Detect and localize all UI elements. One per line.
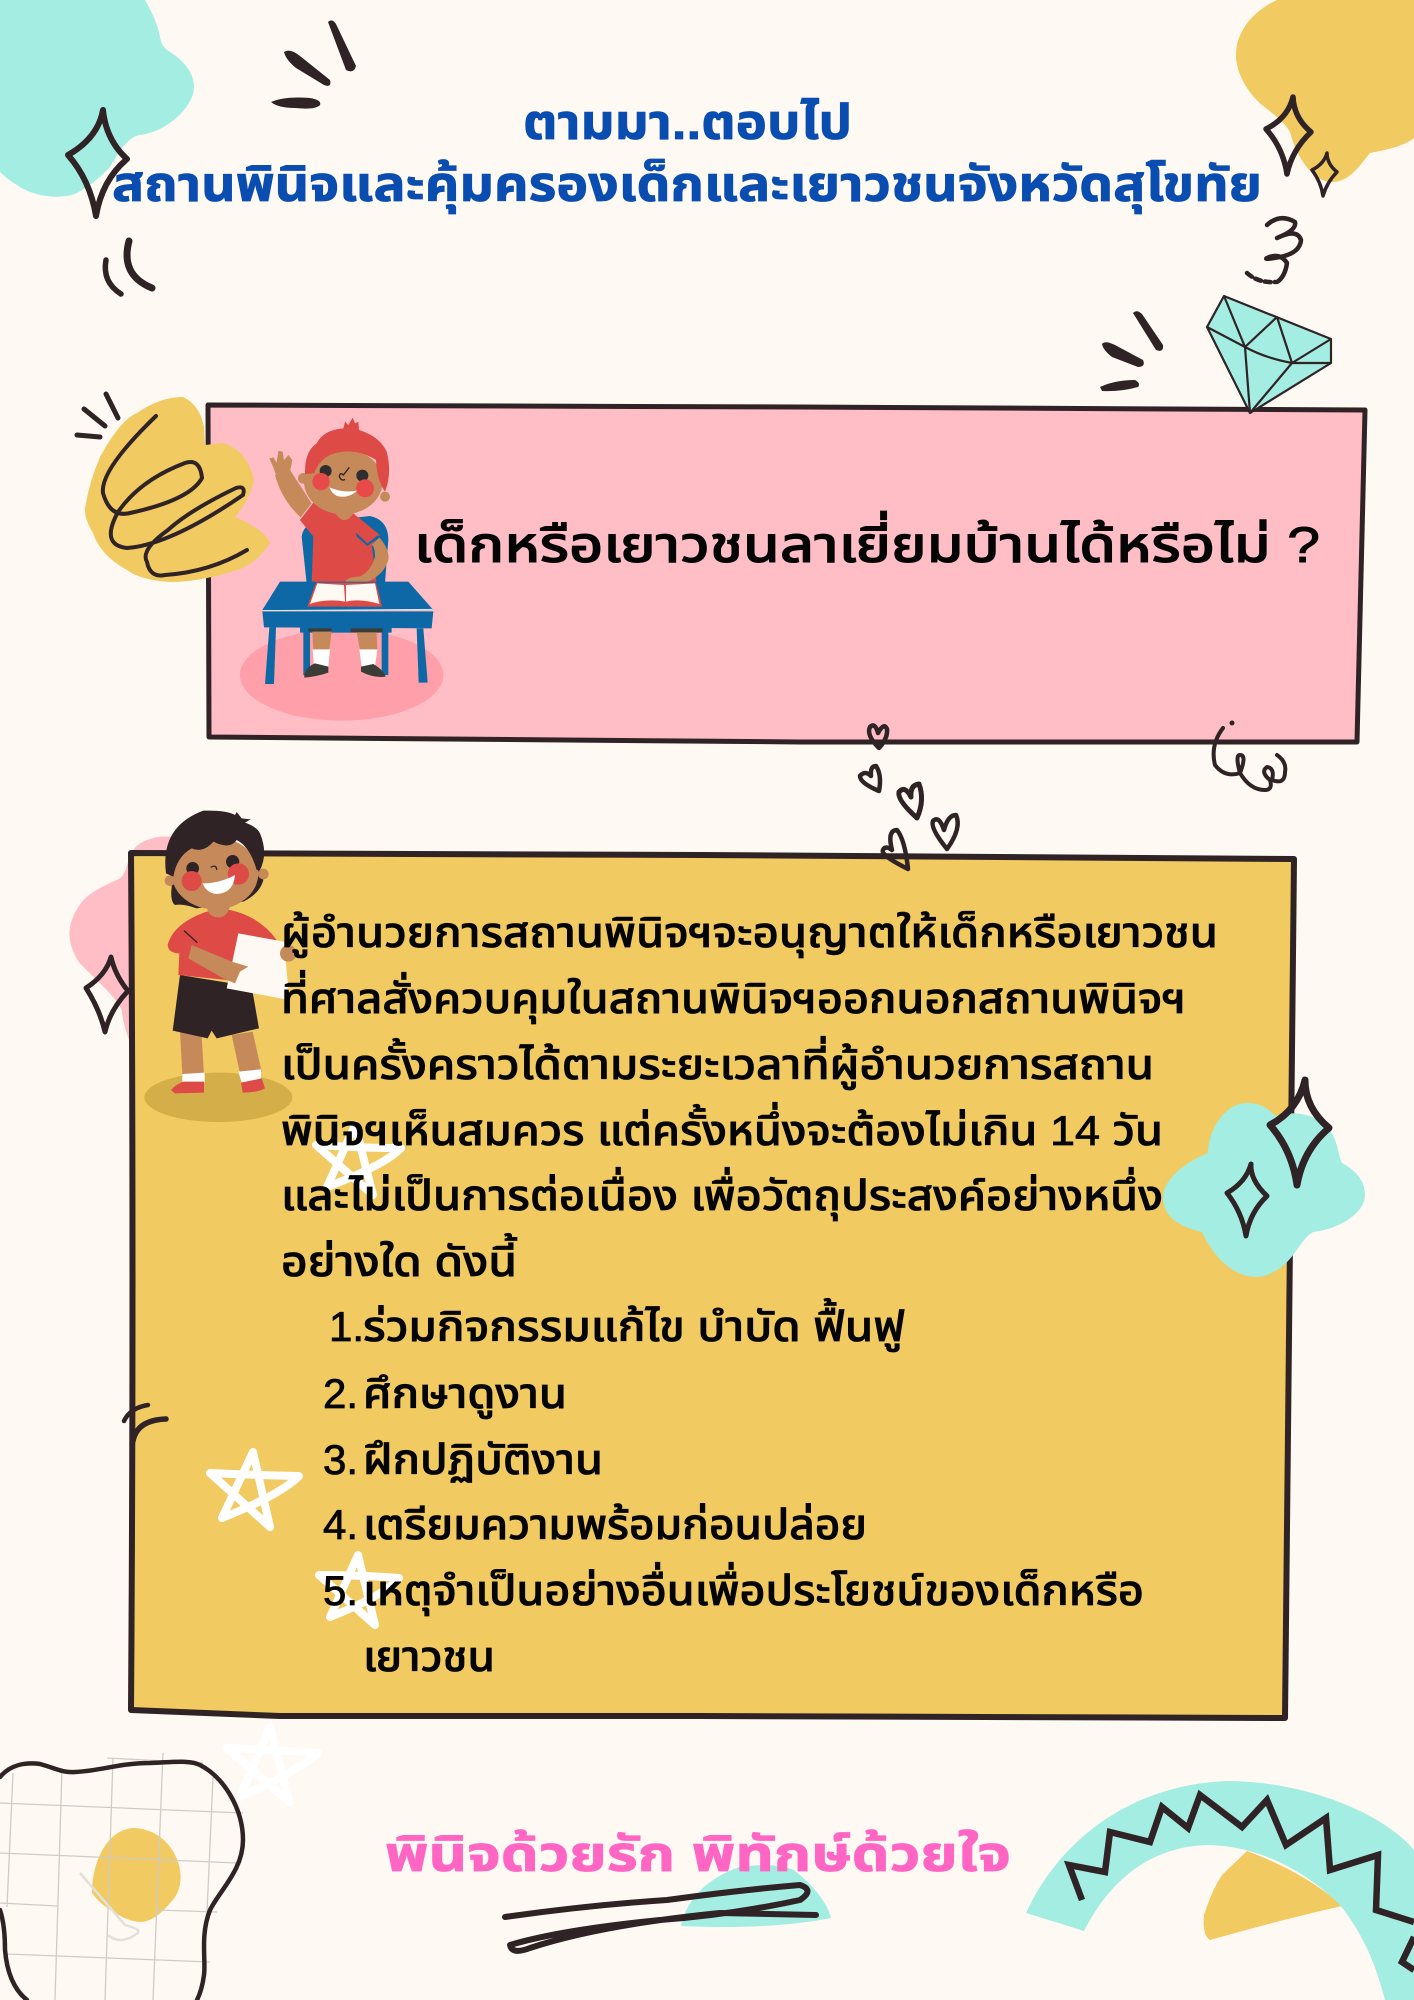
blob with scribble [77,394,270,582]
item 2: 2. [323,1370,358,1417]
title line 1: ตามมา..ตอบไป [523,96,852,150]
title line 2: สถานพินิจและคุ้มครองเด็กและเยาวชนจังหวัดสุโขทัย [112,158,1262,214]
line 2: ที่ศาลสั่งควบคุมในสถานพินิจฯออกนอกสถานพินิจฯ [281,970,1186,1024]
blob: teal top-left [0,0,194,197]
item 5: เหตุจำเป็นอย่างอื่นเพื่อประโยชน์ของเด็กหรือ [363,1562,1144,1616]
blob: yellow top-right [1236,0,1414,182]
list [323,1298,1144,1680]
panel: question (pink) [208,405,1365,742]
star: white faint bottom [227,1727,318,1803]
item 1: 1. [329,1303,364,1350]
arch: teal bottom right [1026,1781,1414,2000]
line 3: เป็นครั้งคราวได้ตามระยะเวลาที่ผู้อำนวยการสถาน [281,1036,1154,1090]
item 3: ฝึกปฏิบัติงาน [363,1436,603,1483]
sparkles: title right [1266,97,1337,196]
item 1: ร่วมกิจกรรมแก้ไข บำบัด ฟื้นฟู [363,1298,905,1352]
item 4: 4. [323,1501,358,1548]
blob: pink behind panel [69,837,193,1047]
question heading: เด็กหรือเยาวชนลาเยี่ยมบ้านได้หรือไม่ ? [414,511,1320,573]
line 1: ผู้อำนวยการสถานพินิจฯจะอนุญาตให้เด็กหรือเยาวชน [281,909,1218,958]
stars on panel [210,1125,401,1625]
mark: panel left edge [124,1405,166,1441]
squiggle: loops [1214,720,1285,790]
burst marks: diamond [1100,311,1163,391]
item 5: 5. [323,1567,358,1614]
item 2: ศึกษาดูงาน [363,1370,567,1419]
teal half blob with scribble [505,1865,831,1951]
title [112,96,1262,214]
line 6: อย่างใด ดังนี้ [281,1233,517,1285]
line 4: พินิจฯเห็นสมควร แต่ครั้งหนึ่งจะต้องไม่เกิน 14 วัน [281,1102,1163,1154]
diamond icon [1207,296,1331,413]
zigzag line [1069,1795,1414,1970]
character: boy at desk [240,418,443,721]
item 4: เตรียมความพร้อมก่อนปล่อย [363,1501,867,1548]
squiggle: top right [1247,218,1301,282]
burst marks: top left [271,20,356,109]
sparkle: title left [68,110,127,216]
hearts [860,725,958,869]
item 3: 3. [323,1436,358,1483]
footer slogan: พินิจด้วยรัก พิทักษ์ด้วยใจ [385,1828,1011,1882]
blob: teal right with sparkles [1163,1080,1365,1277]
body paragraph [281,909,1218,1285]
sparkle: left of panel [86,957,128,1032]
panel: answer (yellow) [131,853,1294,1718]
character: boy with paper [144,811,297,1122]
line 5: และไม่เป็นการต่อเนื่อง เพื่อวัตถุประสงค์อย่างหนึ่ง [281,1167,1163,1221]
marks: left curves [105,241,152,294]
item 5 continued: เยาวชน [363,1633,495,1680]
tile shape: bottom left [0,1753,243,2000]
yellow wedge [1204,1851,1342,1940]
